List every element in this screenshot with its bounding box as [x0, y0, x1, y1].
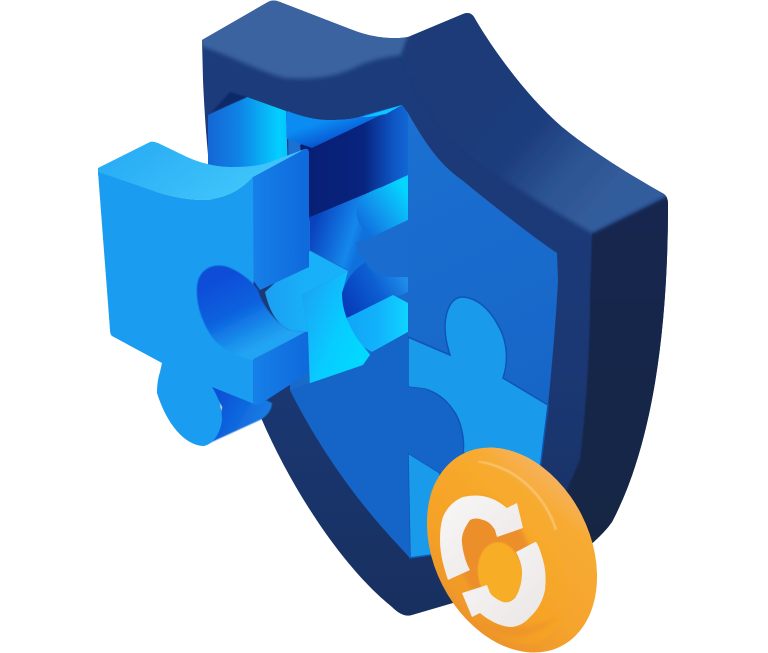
coin inner darker well	[437, 485, 551, 627]
slot bar	[347, 295, 408, 352]
piece right side upper	[253, 149, 309, 290]
shield front rim	[202, 0, 668, 616]
tab top surface	[265, 251, 348, 332]
connecting tab	[265, 251, 408, 390]
puzzle piece: light piece upper right	[408, 297, 548, 470]
puzzle piece: light piece lower	[408, 453, 445, 558]
lower tab side	[203, 380, 272, 446]
piece front face	[98, 172, 257, 446]
cavity back dark wall	[300, 105, 408, 222]
coin lower crescent	[478, 612, 563, 636]
tab cyan body	[302, 271, 372, 390]
coin face	[400, 439, 594, 653]
cavity behind removed piece	[208, 92, 408, 318]
lower panel piece edge	[290, 332, 463, 558]
upper ledge	[356, 175, 408, 237]
coin body	[393, 418, 631, 653]
illustration: shield, puzzle pieces and coin	[98, 0, 668, 652]
piece lower side	[253, 332, 308, 405]
cavity left wall	[208, 97, 288, 180]
wave strip at the top of the cavity	[286, 105, 402, 148]
shadow at the cavity corner	[212, 92, 247, 112]
blue panel	[288, 105, 558, 558]
dark slot under notch	[342, 262, 408, 318]
shield side face	[566, 196, 668, 543]
shield top-right bevel	[402, 5, 672, 233]
bright edge of the wave strip	[362, 105, 402, 117]
shield bevels and side, clipped to the silhouette	[195, 0, 680, 580]
icon: refresh arrow lower	[462, 542, 546, 627]
coin rim highlight	[478, 462, 556, 530]
pulled-out puzzle piece	[98, 142, 309, 446]
piece hole	[197, 266, 307, 360]
notch wall of cavity	[310, 175, 408, 318]
panel section right of the notch	[355, 220, 408, 277]
shield	[195, 0, 680, 616]
icon: refresh arrow upper	[440, 496, 523, 580]
coin centre	[474, 539, 526, 607]
piece top face	[98, 142, 308, 200]
shield top-left bevel	[195, 0, 412, 79]
coin	[393, 418, 631, 653]
